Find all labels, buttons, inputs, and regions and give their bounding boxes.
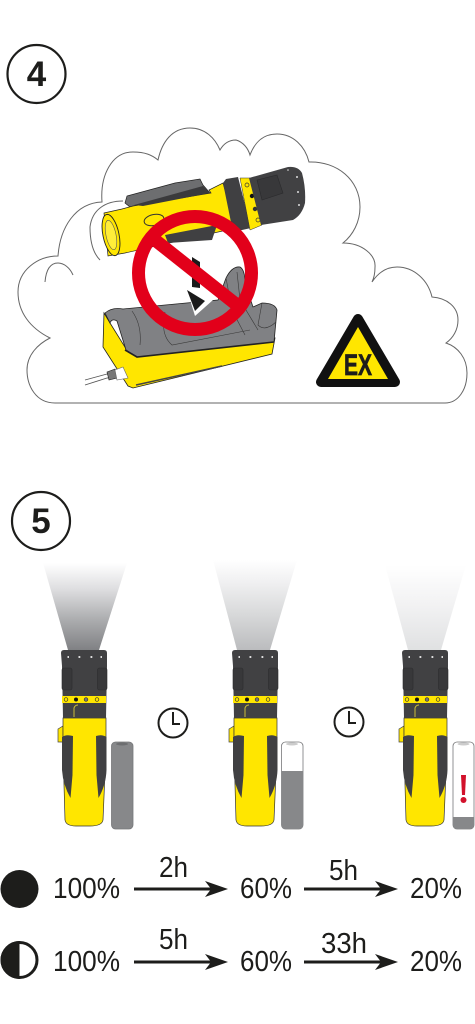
battery low: [453, 742, 474, 829]
row 2: half power runtime: 5h: [159, 924, 188, 956]
downward arrow: [187, 257, 213, 316]
arrow: [134, 881, 228, 897]
light beam: full: [43, 563, 127, 650]
row 1: full power runtime: 5h: [329, 855, 358, 887]
clock icon 2: [334, 708, 364, 736]
step 5 number badge: [12, 492, 70, 550]
icon: full circle: [0, 870, 38, 908]
cloud outline: [18, 128, 467, 403]
row 2: half power runtime: [1, 924, 462, 979]
row 1: full power runtime: 100%: [53, 873, 120, 905]
grey cradle: [105, 267, 277, 357]
EX warning triangle: [321, 319, 395, 382]
flashlight above charger: [99, 167, 305, 257]
row 2: half power runtime: 60%: [240, 946, 292, 978]
slot: [136, 366, 222, 385]
row 1: full power runtime: [0, 852, 462, 908]
arrow: [304, 881, 398, 897]
light beam: medium: [213, 560, 297, 650]
charger cradle: [85, 267, 277, 388]
yellow body: [104, 183, 236, 256]
row 2: half power runtime: 20%: [410, 946, 462, 978]
step 5 number badge: 5: [31, 502, 51, 541]
row 1: full power runtime: 20%: [410, 873, 462, 905]
flashlight 2: [229, 650, 278, 826]
belt clip: [125, 179, 210, 207]
battery full: [112, 742, 133, 829]
flashlight 3: [399, 650, 448, 826]
battery medium: [282, 742, 303, 829]
row 1: full power runtime: 60%: [240, 873, 292, 905]
warning mark: [460, 775, 466, 803]
light beam: dim: [385, 565, 466, 650]
arrow: [304, 954, 398, 970]
row 1: full power runtime: 2h: [159, 852, 188, 884]
step 4 number badge: 4: [27, 55, 47, 94]
arrow: [134, 954, 228, 970]
power cable: [85, 371, 122, 385]
head: [249, 167, 305, 225]
EX warning triangle: EX: [344, 349, 372, 382]
row 2: half power runtime: 100%: [53, 946, 120, 978]
clock icon 1: [158, 708, 188, 738]
yellow ring: [240, 178, 262, 230]
row 2: half power runtime: 33h: [321, 928, 367, 960]
icon: half circle: [1, 941, 37, 979]
step 4 number badge: [8, 45, 66, 103]
flashlight 1: [58, 650, 107, 826]
yellow base: [103, 313, 275, 388]
grip: [165, 225, 217, 243]
prohibition sign: [138, 216, 252, 330]
dark collar: [223, 177, 251, 232]
